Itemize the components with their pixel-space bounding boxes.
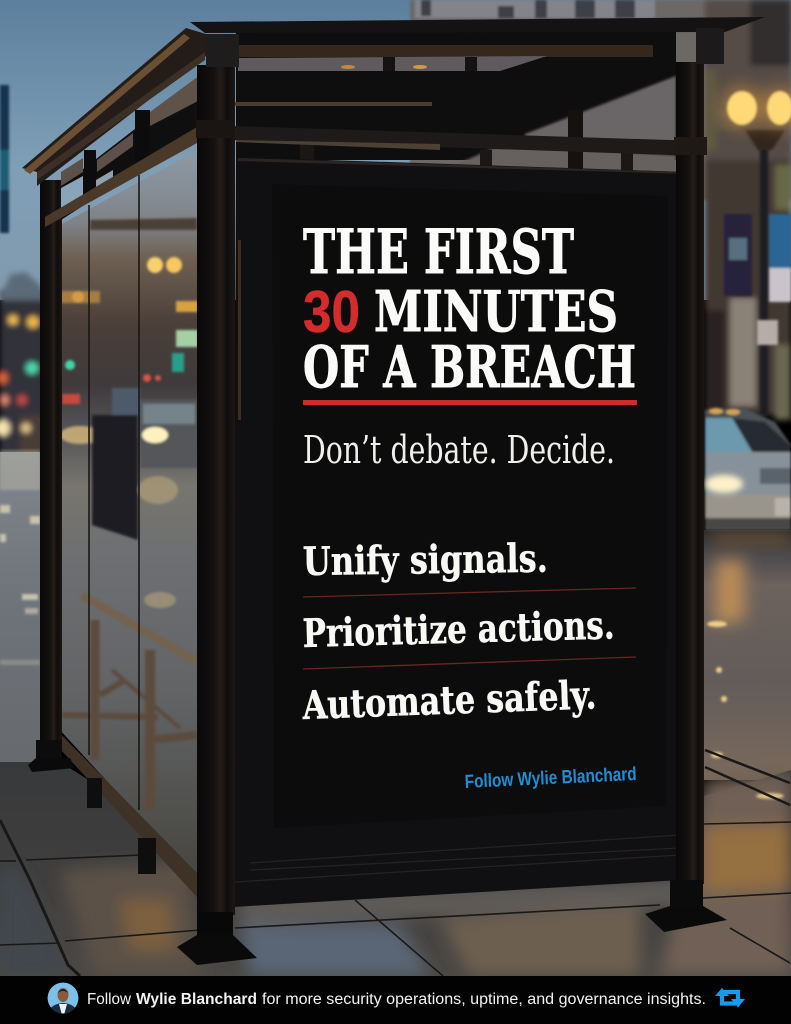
shelter: roof top slab (190, 17, 765, 33)
shelter: sign outer frame (233, 157, 688, 907)
headline line 2: MINUTES (374, 279, 618, 345)
shelter: glass side panel (58, 150, 198, 880)
glass reflections of city lights (60, 218, 198, 608)
shelter: sign top edge (238, 158, 686, 174)
background: street lamps at right (720, 85, 791, 415)
headline number 30: 30 (303, 279, 360, 345)
background: dusk sky (0, 0, 791, 300)
shelter: openings in the side upper band (61, 75, 205, 220)
sign: headline (303, 217, 636, 401)
footer: follow message: for more security operations, uptime, and governance insights. (262, 991, 706, 1008)
ground: pavement joints (0, 750, 791, 976)
footer: repost icon (715, 988, 745, 1008)
background: city at left (0, 272, 45, 463)
ground: wet street at left (0, 452, 60, 772)
shelter: side lower rail (45, 127, 197, 227)
footer: follow message (87, 991, 706, 1008)
sign: divider two (303, 657, 636, 669)
sign: follow credit: Follow Wylie Blanchard (464, 764, 637, 793)
footer: follow message: Follow (87, 991, 132, 1008)
ground: left streaks (0, 450, 40, 665)
shelter: roof and beams behind sign (232, 30, 700, 175)
shelter: rear post (28, 180, 75, 772)
shelter: glass dividers (89, 175, 139, 810)
background: street banner at left (0, 85, 9, 233)
sign: divider one (303, 588, 636, 597)
footer: follow message: Wylie Blanchard (136, 991, 257, 1008)
background: hanging banners at right (724, 214, 791, 345)
headline line 1: THE FIRST (303, 217, 574, 288)
shelter: bottom rail of side panel (47, 720, 197, 897)
footer bar (0, 976, 791, 1024)
background: building at top right (410, 0, 791, 200)
footer: avatar (48, 982, 78, 1014)
ground: road at right (690, 530, 791, 780)
sign: black poster panel (272, 184, 668, 828)
shelter: corner bracket right (696, 28, 724, 64)
shelter: roof side fascia (22, 28, 206, 186)
sign: tagline: Don’t debate. Decide. (303, 428, 615, 472)
shelter: lower rail lines (218, 835, 680, 883)
shelter: frame amber edge (238, 240, 241, 420)
ground: specular glints (707, 621, 784, 799)
sign: action three: Automate safely. (301, 672, 597, 729)
ground: warm and cool reflections (0, 533, 791, 976)
shelter: right post (645, 62, 727, 932)
sign: red rule (303, 400, 637, 405)
sign: action two: Prioritize actions. (302, 602, 615, 657)
ground: sidewalk (0, 762, 791, 976)
car at right (705, 408, 791, 530)
shelter: small glass legs (87, 778, 156, 874)
headline line 3: OF A BREACH (303, 334, 636, 401)
shelter: main front post (177, 65, 257, 965)
background: building facade at right (705, 0, 791, 420)
shelter: corner bracket left (206, 34, 239, 67)
sign: action one: Unify signals. (302, 536, 548, 585)
bench reflection (62, 595, 197, 810)
